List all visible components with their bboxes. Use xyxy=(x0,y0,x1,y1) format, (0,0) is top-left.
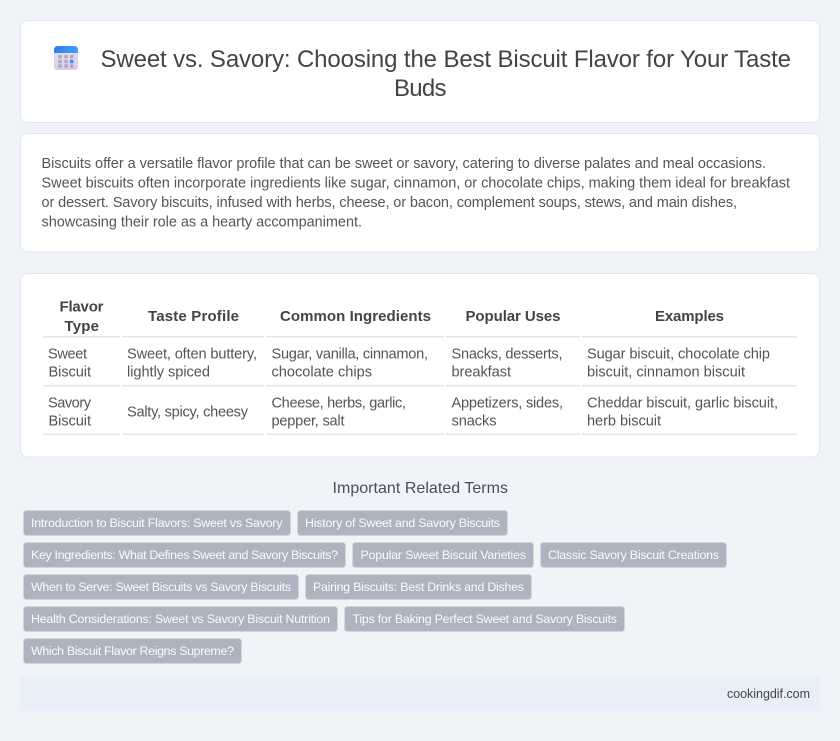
tag: health xyxy=(24,606,338,632)
table header: Examples xyxy=(655,308,724,325)
panel: comparison table xyxy=(20,274,820,457)
intro text block: or dessert. Savory biscuits, infused with herbs, cheese, or bacon, complement soups, stews, and main dishes, xyxy=(42,195,737,211)
tag: pairing xyxy=(306,574,532,600)
related terms tags xyxy=(24,510,726,664)
table header xyxy=(43,298,797,338)
table row: savory biscuit: Cheese, herbs, garlic, xyxy=(272,395,406,411)
table row: sweet biscuit: Sweet, often buttery, xyxy=(127,346,257,362)
title xyxy=(100,46,791,102)
tag: popular sweet: Popular Sweet Biscuit Varieties xyxy=(360,548,526,562)
title: Buds xyxy=(394,75,446,102)
table header: Common Ingredients xyxy=(280,308,431,325)
intro text block: Sweet biscuits often incorporate ingredients like sugar, cinnamon, or chocolate chips, making them ideal for breakfast xyxy=(42,176,790,192)
table header: Taste Profile xyxy=(148,308,239,325)
tag: pairing: Pairing Biscuits: Best Drinks and Dishes xyxy=(313,580,524,594)
tag: health: Health Considerations: Sweet vs Savory Biscuit Nutrition xyxy=(31,612,330,626)
tag: key ingredients xyxy=(24,542,346,568)
table row: sweet biscuit xyxy=(43,346,797,386)
tag: which reigns xyxy=(24,638,242,664)
table row: sweet biscuit: Sugar biscuit, chocolate chip xyxy=(587,346,770,362)
table row: sweet biscuit: biscuit, cinnamon biscuit xyxy=(587,364,745,380)
table row: savory biscuit: Appetizers, sides, xyxy=(452,395,563,411)
tag: key ingredients: Key Ingredients: What Defines Sweet and Savory Biscuits? xyxy=(31,548,338,562)
panel: introduction xyxy=(20,134,820,252)
table header: Flavor xyxy=(60,298,104,316)
tag: history: History of Sweet and Savory Biscuits xyxy=(305,516,500,530)
table row: savory biscuit: snacks xyxy=(452,413,496,429)
panel: header xyxy=(20,20,820,122)
tag: introduction: Introduction to Biscuit Flavors: Sweet vs Savory xyxy=(31,516,283,530)
intro text block: Biscuits offer a versatile flavor profile that can be sweet or savory, catering to diverse palates and meal occasions. xyxy=(42,156,766,172)
table row: sweet biscuit: Snacks, desserts, xyxy=(452,346,562,362)
table row: sweet biscuit: Sugar, vanilla, cinnamon, xyxy=(272,346,428,362)
intro text block: showcasing their role as a hearty accompaniment. xyxy=(42,214,362,230)
table row: sweet biscuit: Sweet xyxy=(48,346,87,362)
intro text block xyxy=(42,156,790,230)
tag: classic savory xyxy=(540,542,726,568)
table row: sweet biscuit: breakfast xyxy=(452,364,511,380)
tag: which reigns: Which Biscuit Flavor Reigns Supreme? xyxy=(31,644,234,658)
footer: cookingdif.com xyxy=(727,687,810,701)
table header: Popular Uses xyxy=(466,308,560,325)
tag: introduction xyxy=(24,510,290,536)
heading: important related terms: Important Related Terms xyxy=(332,480,508,497)
footer xyxy=(20,677,820,711)
table row: sweet biscuit: chocolate chips xyxy=(272,364,372,380)
table row: savory biscuit xyxy=(43,395,797,435)
tag: popular sweet xyxy=(352,542,534,568)
tag: when to serve xyxy=(24,574,298,600)
table header: Type xyxy=(64,318,99,335)
table row: savory biscuit: Savory xyxy=(48,395,92,411)
tag: tips xyxy=(344,606,624,632)
table row: sweet biscuit: Biscuit xyxy=(48,364,91,380)
table row: savory biscuit: Cheddar biscuit, garlic biscuit, xyxy=(587,395,778,411)
title: Sweet vs. Savory: Choosing the Best Biscuit Flavor for Your Taste xyxy=(100,46,791,73)
tag: history xyxy=(298,510,508,536)
table row: savory biscuit: herb biscuit xyxy=(587,413,661,429)
tag: classic savory: Classic Savory Biscuit Creations xyxy=(548,548,719,562)
icon: calendar xyxy=(54,46,78,70)
tag: tips: Tips for Baking Perfect Sweet and Savory Biscuits xyxy=(352,612,617,626)
table row: savory biscuit: Salty, spicy, cheesy xyxy=(127,404,249,420)
table row: sweet biscuit: lightly spiced xyxy=(127,364,210,380)
table row: savory biscuit: Biscuit xyxy=(48,413,91,429)
tag: when to serve: When to Serve: Sweet Biscuits vs Savory Biscuits xyxy=(31,580,291,594)
table row: savory biscuit: pepper, salt xyxy=(272,413,344,429)
